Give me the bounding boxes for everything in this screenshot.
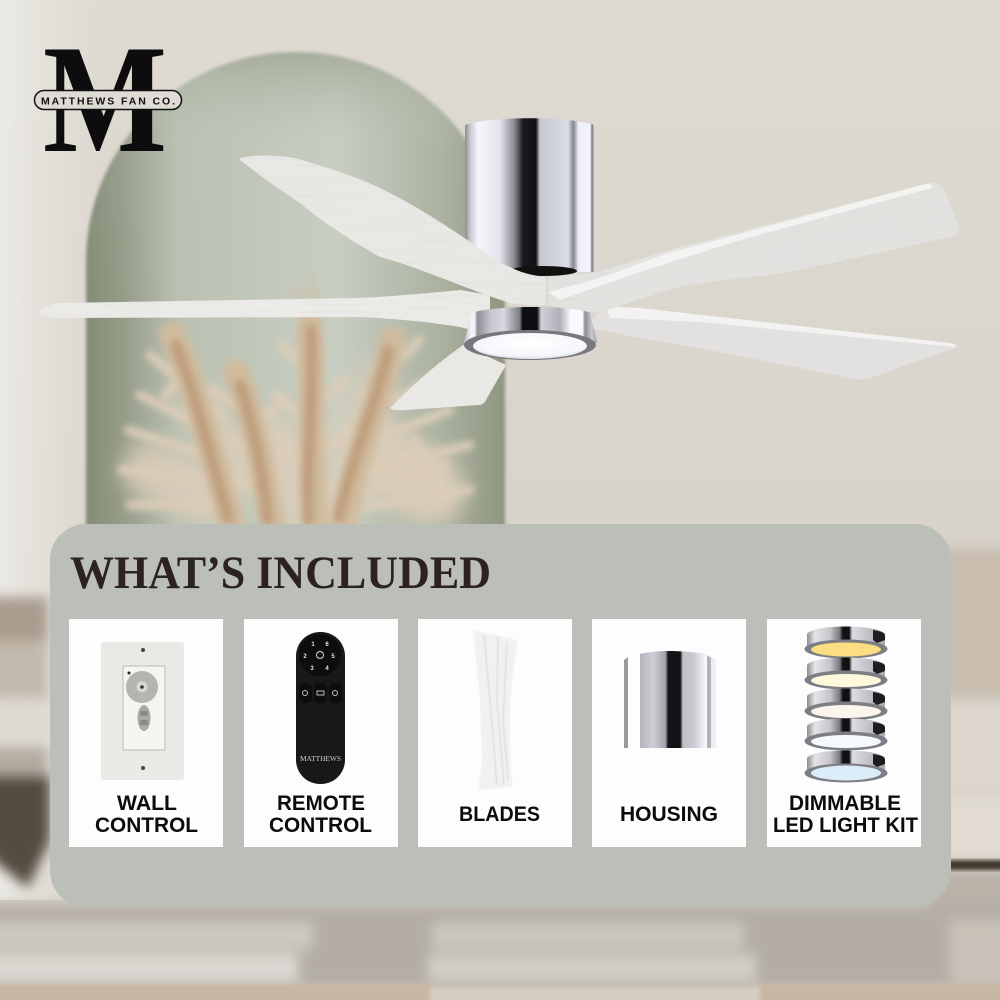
icon: remote: 2: [303, 654, 307, 660]
icon: blade: [473, 630, 517, 790]
heading: WHAT’S INCLUDED: [70, 547, 491, 599]
panel: what's included: [50, 524, 951, 907]
logo: Matthews Fan Co.: MATTHEWS FAN CO.: [41, 96, 175, 108]
card: remote control: [244, 619, 398, 847]
icon: LED discs: [804, 626, 888, 782]
ceiling fan: [38, 116, 959, 410]
label: WALL: [117, 792, 177, 815]
logo: Matthews Fan Co.: M: [43, 13, 167, 185]
label: HOUSING: [620, 803, 718, 826]
icon: remote: [296, 632, 345, 784]
fan blade: left long: [38, 290, 490, 335]
fan blade: upper right: [548, 183, 959, 313]
icon: remote: 1: [311, 642, 315, 648]
arched wall niche: [86, 50, 505, 530]
icon: remote: 4: [325, 666, 329, 672]
housing: [465, 116, 594, 276]
fan blade: right lower: [590, 306, 957, 380]
fan blade: lower short: [390, 345, 506, 410]
light kit hub: [464, 307, 597, 360]
card: blades: [418, 619, 572, 847]
label: LED LIGHT KIT: [773, 814, 918, 837]
card: housing: [592, 619, 746, 847]
fan blade: upper left: [240, 156, 546, 305]
card: wall control: [69, 619, 223, 847]
label: DIMMABLE: [789, 792, 901, 815]
icon: remote: 3: [310, 666, 314, 672]
icon: remote: MATTHEWS: [300, 754, 341, 763]
pampas grass: [122, 275, 470, 525]
icon: housing: [624, 651, 716, 748]
icon: wall plate: [101, 642, 184, 780]
icon: remote: 5: [331, 654, 335, 660]
label: CONTROL: [269, 814, 372, 837]
label: REMOTE: [277, 792, 365, 815]
label: CONTROL: [95, 814, 198, 837]
sofa and floor background: [0, 548, 1000, 987]
icon: remote: 6: [325, 642, 329, 648]
label: BLADES: [459, 803, 540, 826]
card: dimmable LED light kit: [767, 619, 921, 847]
